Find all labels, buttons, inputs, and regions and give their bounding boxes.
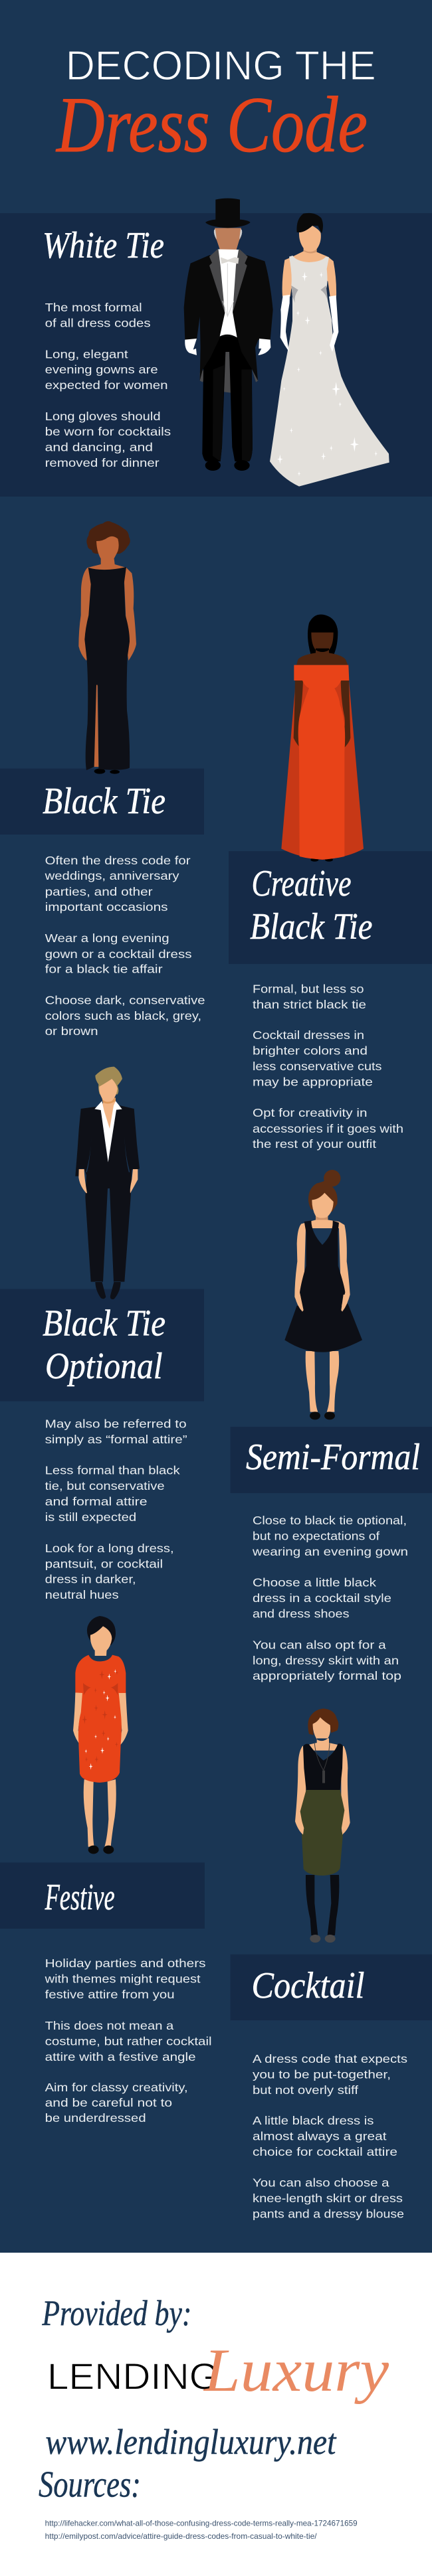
text: Sources heading: Sources:: [39, 2464, 141, 2506]
text: White Tie details: removed for dinner: [45, 456, 160, 469]
text: Black Tie details: [44, 854, 205, 1038]
text: Creative Black Tie details: Cocktail dresses in: [253, 1028, 364, 1042]
text: Black Tie Optional details: neutral hues: [45, 1588, 119, 1601]
text: Black Tie Optional details: is still expected: [45, 1510, 136, 1524]
text: Festive details: be underdressed: [45, 2111, 146, 2125]
panel: Black Tie: [0, 521, 205, 1038]
heading: Creative Black Tie: Black Tie: [250, 906, 372, 947]
panel: Semi-Formal: [231, 1170, 432, 1682]
text: Cocktail details: You can also choose a: [253, 2176, 389, 2190]
text: Festive details: [44, 1957, 212, 2125]
text: Black Tie Optional details: Look for a long dress,: [45, 1542, 174, 1555]
figure: woman in little black dress: [284, 1170, 362, 1419]
title: DECODING THE: [66, 43, 376, 89]
text: Cocktail details: you to be put-together,: [253, 2067, 391, 2081]
text: White Tie details: and dancing, and: [45, 441, 153, 454]
heading: Black Tie Optional: [43, 1303, 165, 1387]
text: Semi-Formal details: You can also opt for a: [253, 1639, 386, 1652]
text: Black Tie details: weddings, anniversary: [44, 869, 179, 882]
text: Cocktail details: pants and a dressy blouse: [253, 2207, 404, 2220]
heading: White Tie: White Tie: [43, 225, 164, 266]
text: White Tie details: [45, 301, 171, 469]
text: Black Tie Optional details: dress in darker,: [45, 1572, 136, 1585]
text: Creative Black Tie details: less conservative cuts: [253, 1060, 382, 1073]
text: Cocktail details: A little black dress is: [253, 2114, 374, 2127]
text: source links: http://lifehacker.com/what-all-of-those-confusing-dress-code-terms-really-mea-1724671659: [45, 2519, 358, 2528]
text: Festive details: and be careful not to: [45, 2096, 172, 2109]
text: Black Tie Optional details: [45, 1417, 187, 1601]
text: White Tie details: of all dress codes: [45, 316, 151, 329]
text: White Tie details: evening gowns are: [45, 363, 158, 376]
text: Creative Black Tie details: accessories if it goes with: [253, 1122, 403, 1135]
sparkles on dress: [82, 1669, 118, 1770]
text: Creative Black Tie details: than strict black tie: [253, 998, 366, 1011]
heading: Festive: Festive: [45, 1877, 115, 1918]
text: Black Tie Optional details: Less formal than black: [45, 1464, 180, 1477]
sparkles on gown: [277, 272, 378, 476]
text: Cocktail details: [253, 2052, 407, 2220]
figure: woman in white gown: [270, 213, 389, 487]
text: Black Tie details: for a black tie affair: [45, 963, 163, 976]
text: Black Tie details: or brown: [45, 1024, 98, 1038]
text: Semi-Formal details: appropriately formal top: [253, 1669, 401, 1682]
logo: Lending Luxury: LENDING: [47, 2356, 219, 2397]
heading: Black Tie Optional: Black Tie: [43, 1303, 165, 1344]
figure: man in white tie: [184, 199, 273, 471]
figure: woman in black gown: [78, 521, 136, 774]
title: [55, 43, 376, 169]
panel: Black Tie Optional: [0, 1067, 204, 1601]
text: Creative Black Tie details: brighter colors and: [253, 1044, 368, 1058]
text: source links: http://emilypost.com/advice/attire-guide-dress-codes-from-casual-to-white-tie/: [45, 2532, 317, 2541]
title: Dress Code: [55, 80, 368, 169]
text: Black Tie Optional details: simply as “formal attire”: [45, 1433, 187, 1446]
necklace: [314, 1743, 330, 1783]
heading: Black Tie Optional: Optional: [45, 1346, 163, 1387]
figure: woman in olive skirt: [295, 1708, 350, 1943]
text: Festive details: This does not mean a: [45, 2019, 174, 2032]
text: Semi-Formal details: long, dressy skirt with an: [253, 1654, 399, 1667]
text: Festive details: attire with a festive angle: [45, 2050, 196, 2063]
figure: woman in black suit: [75, 1067, 140, 1299]
heading: Cocktail: Cocktail: [251, 1965, 364, 2006]
text: Provided by: Provided by:: [42, 2293, 191, 2333]
text: Semi-Formal details: but no expectations of: [253, 1530, 379, 1543]
heading: Creative Black Tie: Creative: [251, 863, 351, 904]
text: Cocktail details: A dress code that expects: [253, 2052, 407, 2065]
text: Black Tie Optional details: May also be referred to: [45, 1417, 187, 1430]
text: source links: [45, 2519, 358, 2541]
text: Cocktail details: almost always a great: [253, 2129, 387, 2142]
text: Festive details: festive attire from you: [45, 1988, 175, 2001]
panel: Creative Black Tie: [229, 615, 432, 1151]
text: Cocktail details: knee-length skirt or dress: [253, 2192, 403, 2205]
text: Black Tie Optional details: pantsuit, or cocktail: [45, 1558, 163, 1571]
text: Festive details: Holiday parties and others: [45, 1957, 206, 1970]
text: Semi-Formal details: dress in a cocktail style: [253, 1591, 391, 1605]
logo: Lending Luxury: Luxury: [203, 2336, 389, 2404]
text: Creative Black Tie details: the rest of your outfit: [253, 1137, 376, 1151]
text: Cocktail details: choice for cocktail attire: [253, 2145, 397, 2158]
text: Black Tie details: Often the dress code for: [45, 854, 191, 867]
text: Creative Black Tie details: may be appropriate: [253, 1076, 373, 1089]
text: Festive details: with themes might request: [44, 1972, 201, 1985]
figure: woman in red caped gown: [281, 615, 364, 862]
heading: Black Tie: Black Tie: [43, 781, 165, 822]
text: Black Tie details: parties, and other: [45, 885, 153, 898]
text: Semi-Formal details: and dress shoes: [253, 1607, 350, 1620]
text: White Tie details: expected for women: [45, 378, 168, 392]
text: White Tie details: The most formal: [45, 301, 142, 314]
panel: Cocktail: [231, 1708, 432, 2220]
text: Black Tie details: gown or a cocktail dress: [45, 947, 192, 961]
panel: Festive: [0, 1616, 212, 2125]
figure: woman in festive red dress: [73, 1616, 128, 1854]
logo: Lending Luxury: [47, 2336, 389, 2404]
text: Creative Black Tie details: Formal, but less so: [253, 983, 364, 996]
text: Black Tie Optional details: tie, but conservative: [45, 1479, 165, 1492]
text: Black Tie details: important occasions: [45, 900, 168, 914]
text: Semi-Formal details: Choose a little black: [253, 1576, 376, 1589]
text: Black Tie Optional details: and formal attire: [45, 1495, 148, 1508]
panel: White Tie: [0, 199, 432, 497]
text: Black Tie details: Choose dark, conservative: [45, 994, 205, 1007]
text: Festive details: Aim for classy creativity,: [45, 2081, 188, 2094]
text: Creative Black Tie details: [253, 983, 403, 1151]
text: Cocktail details: but not overly stiff: [253, 2083, 358, 2097]
text: Semi-Formal details: [252, 1514, 408, 1682]
text: Creative Black Tie details: Opt for creativity in: [253, 1106, 367, 1119]
text: website: www.lendingluxury.net: [45, 2422, 337, 2462]
text: White Tie details: be worn for cocktails: [45, 425, 171, 438]
text: White Tie details: Long, elegant: [45, 348, 128, 361]
text: Festive details: costume, but rather cocktail: [45, 2034, 212, 2048]
heading: Creative Black Tie: [250, 863, 372, 947]
text: Semi-Formal details: Close to black tie optional,: [253, 1514, 407, 1527]
text: Semi-Formal details: wearing an evening gown: [252, 1545, 408, 1558]
text: Black Tie details: Wear a long evening: [45, 931, 169, 945]
footer: provider and sources: [39, 2293, 389, 2541]
text: Black Tie details: colors such as black, grey,: [45, 1009, 201, 1022]
text: White Tie details: Long gloves should: [45, 410, 161, 423]
